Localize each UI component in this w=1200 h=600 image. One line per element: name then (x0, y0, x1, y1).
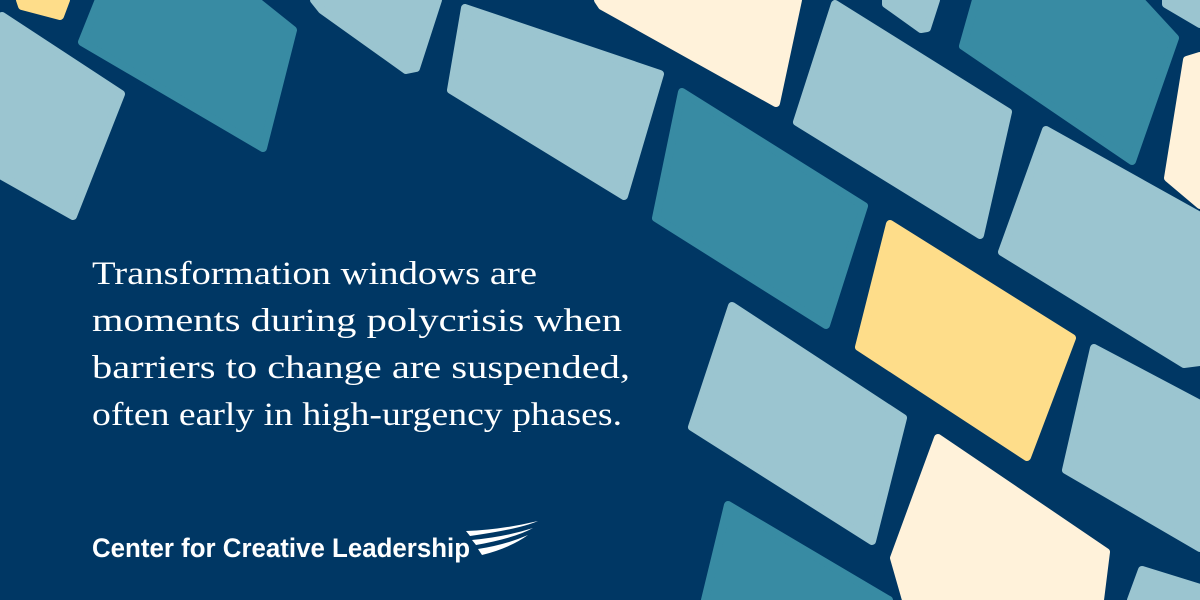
icon: swoosh (466, 521, 538, 555)
logo: Center for Creative Leadership (92, 533, 470, 563)
headline text: barriers to change are suspended, (92, 350, 630, 386)
headline text: Transformation windows are (92, 256, 537, 292)
headline text: often early in high-urgency phases. (92, 397, 622, 433)
logo (92, 521, 538, 563)
headline text: moments during polycrisis when (92, 303, 622, 339)
headline text (92, 256, 630, 433)
